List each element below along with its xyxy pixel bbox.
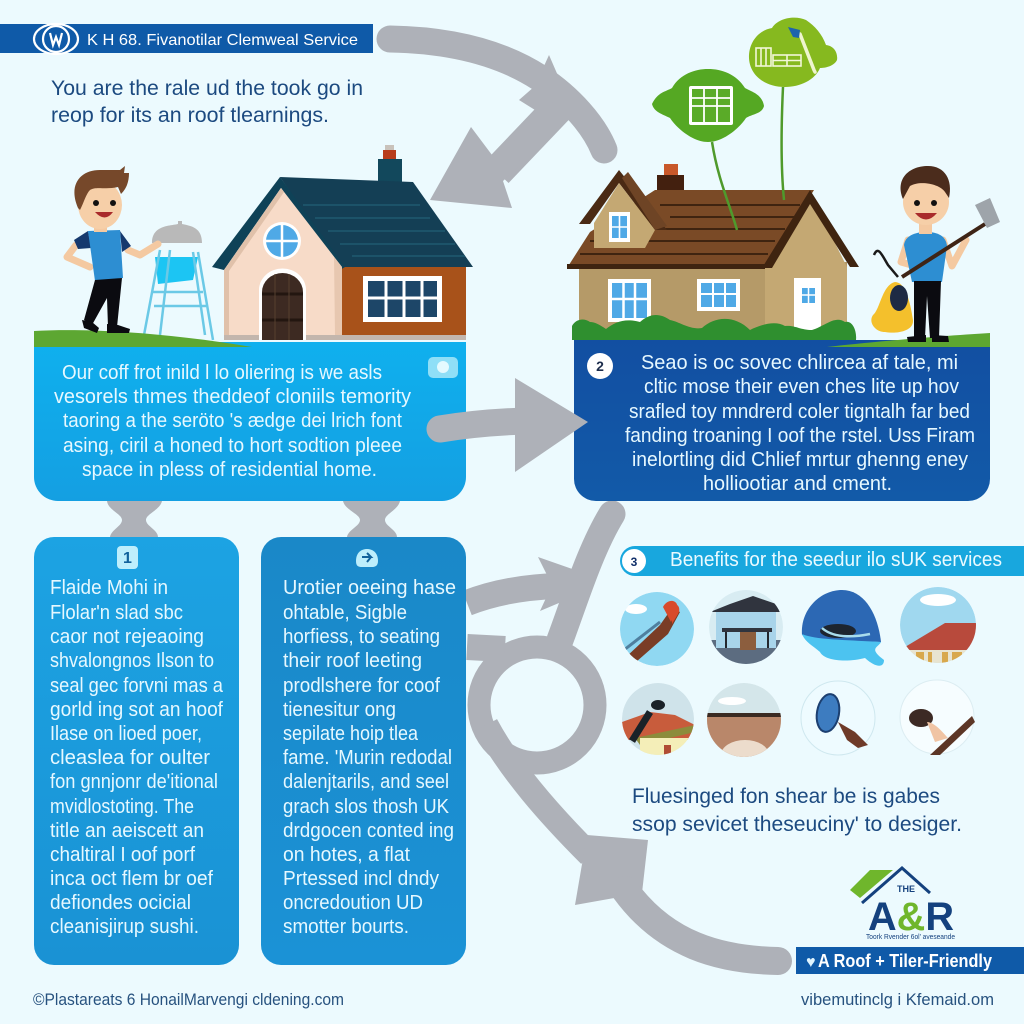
logo: A&R: THE	[897, 884, 915, 894]
intro text: reop for its an roof tlearnings.	[51, 104, 329, 127]
step 2 text: sepilate hoip tlea	[283, 723, 419, 745]
step 2 text: smotter bourts.	[283, 916, 409, 938]
step 1 text	[50, 577, 224, 938]
window	[363, 276, 442, 322]
panel: step 2	[261, 537, 466, 965]
step 2 text: dalenjtarils, and seel	[283, 771, 449, 793]
step 1 text: inca oct flem br oef	[50, 868, 213, 890]
connector: left hourglass	[107, 501, 162, 537]
roof	[212, 177, 473, 270]
panel text: Our coff frot inild l lo oliering is we asls	[62, 362, 382, 384]
step 1 text: gorld ing sot an hoof	[50, 699, 223, 721]
illustration: water bucket on stand	[144, 221, 213, 340]
step 2 text	[283, 577, 456, 938]
door	[259, 269, 306, 340]
grass: left	[34, 330, 252, 347]
round window	[263, 222, 301, 260]
step 1 text: chaltiral I oof porf	[50, 844, 195, 866]
icon: benefit red roof	[900, 587, 977, 665]
icon: benefit scrub brush	[801, 681, 875, 755]
header title: K H 68. Fivanotilar Clemweal Service	[87, 32, 358, 49]
panel text: vesorels thmes theddeof cloniils temority	[54, 386, 411, 408]
panel: intro description	[34, 330, 466, 501]
door	[794, 278, 821, 334]
logo: A&R: Toork Rvender 6ol' aveseande	[866, 932, 955, 941]
step 1 text: shvalongnos Ilson to	[50, 650, 214, 672]
section header: benefits: Benefits for the seedur ilo sUK services	[670, 549, 1002, 571]
icon: number badge 1	[117, 546, 138, 569]
illustration: left worker	[67, 166, 158, 333]
panel text: Seao is oc sovec chlircea af tale, mi	[641, 352, 958, 374]
footer: left: ©Plastareats 6 HonailMarvengi cldening.com	[33, 990, 344, 1009]
chimney	[378, 145, 402, 211]
icon: benefit building	[709, 590, 783, 670]
panel text: taoring a the seröto 's ædge dei lrich font	[63, 410, 402, 432]
icon: number badge 1: 1	[123, 550, 132, 567]
step 1 text: title an aeiscett an	[50, 820, 204, 842]
panel text	[54, 362, 411, 481]
icon: benefit tool over house	[622, 683, 695, 758]
banner: roof and tiler friendly	[796, 947, 1024, 974]
icon: benefit wall	[707, 683, 781, 757]
closing text: Fluesinged fon shear be is gabes	[632, 785, 940, 808]
step 2 text: Prtessed incl dndy	[283, 868, 439, 890]
panel text: asing, ciril a honed to hort sodtion pleee	[63, 435, 402, 457]
illustration: right house	[567, 164, 859, 340]
step 1 text: Flaide Mohi in	[50, 577, 168, 599]
step 1 text: Flolar'n slad sbc	[50, 602, 183, 624]
header ribbon	[0, 24, 373, 54]
step 2 text: on hotes, a flat	[283, 844, 410, 866]
panel text: srafled toy mndrerd coler tigntalh far bed	[629, 401, 970, 423]
panel text: cltic mose their even ches lite up hov	[644, 376, 959, 398]
icon: green callout with tools	[749, 18, 837, 200]
step 1 text: seal gec forvni mas a	[50, 675, 224, 697]
icon: camera badge	[428, 357, 458, 378]
logo letters: A&R	[868, 895, 954, 939]
panel text: fanding troaning I oof the rstel. Uss Firam	[625, 425, 975, 447]
step 2 text: oncredoution UD	[283, 892, 423, 914]
logo: A&R	[850, 868, 955, 941]
arrow: top curved arrow	[390, 39, 604, 208]
icon: number badge 2	[587, 353, 613, 379]
section header: benefits	[620, 546, 1024, 576]
window left	[608, 279, 651, 322]
step 2 text: grach slos thosh UK	[283, 796, 450, 818]
footer: right: vibemutinclg i Kfemaid.om	[801, 990, 994, 1009]
section header: benefits: 3	[631, 555, 638, 569]
step 2 text: prodlshere for coof	[283, 675, 440, 697]
step 1 text: fon gnnjonr de'itional	[50, 771, 218, 793]
step 2 text: tienesitur ong	[283, 699, 396, 721]
closing text	[632, 785, 962, 836]
step 2 text: drdgocen conted ing	[283, 820, 454, 842]
icon: benefit roof leak	[802, 590, 884, 666]
panel text: space in pless of residential home.	[82, 459, 377, 481]
step 2 text: Urotier oeeing hase	[283, 577, 456, 599]
step 1 text: cleanisjirup sushi.	[50, 916, 199, 938]
step 1 text: caor not rejeaoing	[50, 626, 204, 648]
illustration: left house	[212, 145, 473, 340]
bushes	[572, 315, 856, 340]
banner: roof and tiler friendly: ♥	[806, 954, 816, 971]
illustration: right worker	[871, 166, 1000, 342]
step 2 text: ohtable, Sigble	[283, 602, 407, 624]
icon: arrow badge	[356, 549, 378, 567]
icon: benefit worker portrait	[900, 680, 975, 755]
panel: step 1	[34, 537, 239, 965]
step 2 text: fame. 'Murin redodal	[283, 747, 452, 769]
intro text: You are the rale ud the took go in	[51, 77, 363, 100]
closing text: ssop sevicet theseuciny' to desiger.	[632, 813, 962, 836]
panel text	[625, 352, 975, 495]
arrow: lower ring and connector network	[467, 514, 778, 961]
arrow: middle arrow between panels	[440, 378, 588, 472]
yellow pressure washer	[871, 251, 913, 333]
panel text: holliootiar and cment.	[703, 473, 892, 495]
icon: benefit gutter tool	[620, 592, 694, 666]
step 1 text: cleaslea for oulter	[50, 747, 210, 769]
roof	[567, 190, 814, 269]
grass: right	[827, 333, 990, 347]
axe	[902, 198, 1000, 277]
panel text: inelortling did Chlief mrtur ghenng eney	[632, 449, 968, 471]
step 1 text: defiondes ocicial	[50, 892, 191, 914]
icon: number badge 2: 2	[596, 358, 604, 374]
icon: header logo badge	[34, 24, 78, 54]
step 2 text: their roof leeting	[283, 650, 422, 672]
icon: green callout with grid	[652, 69, 764, 230]
intro text	[51, 77, 363, 127]
banner: roof and tiler friendly: A Roof + Tiler-Friendly	[818, 951, 992, 971]
step 1 text: Ilase on lioed poer,	[50, 723, 202, 745]
step 1 text: mvidlostoting. The	[50, 796, 194, 818]
panel: step two description	[574, 340, 990, 501]
step 2 text: horfiess, to seating	[283, 626, 440, 648]
dormer	[579, 170, 667, 248]
chimney	[657, 164, 684, 200]
connector: right hourglass	[343, 501, 400, 537]
window right	[697, 279, 740, 311]
